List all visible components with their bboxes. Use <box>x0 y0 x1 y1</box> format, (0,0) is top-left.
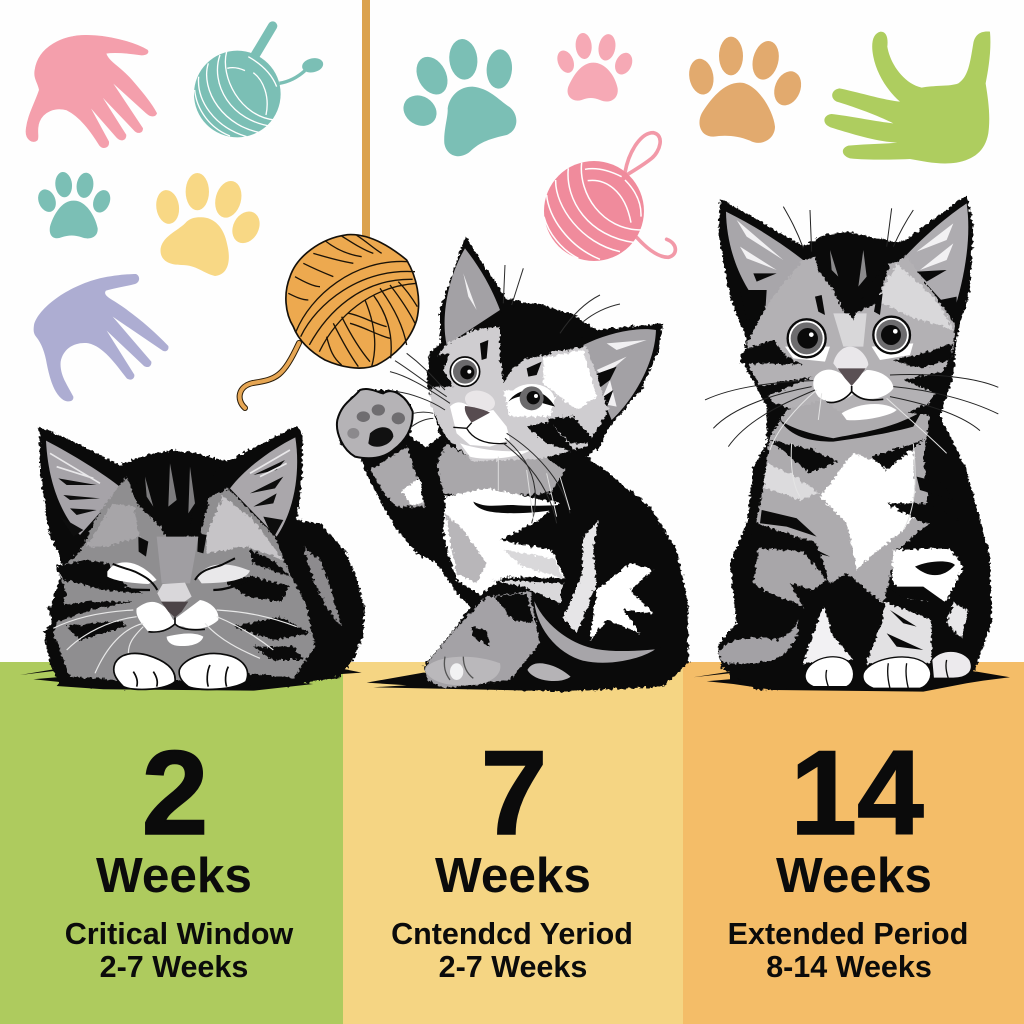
chest shading <box>445 513 487 583</box>
icon group: left decorations <box>26 26 325 401</box>
nose <box>465 406 490 423</box>
chest white fur <box>820 450 914 570</box>
text: 7 weeks label: 2-7 Weeks <box>439 950 587 984</box>
face <box>747 257 955 417</box>
mouth and chin <box>148 617 205 632</box>
ear fur <box>737 220 953 270</box>
cheek stripes <box>47 550 310 660</box>
icon: teal yarn <box>194 26 325 137</box>
chest white fur <box>443 488 565 595</box>
text: 14 weeks label: 8-14 Weeks <box>766 950 932 984</box>
panel: 2 weeks background <box>0 662 343 1024</box>
icon: pink hand <box>26 35 157 148</box>
right cheek stripes <box>527 417 597 453</box>
kitten silhouette <box>337 237 688 692</box>
illustration: sitting kitten <box>693 195 1010 692</box>
right front leg <box>867 602 932 663</box>
ears <box>445 248 500 345</box>
text: 7 weeks label: Weeks <box>435 848 591 903</box>
text: 14 weeks label: Extended Period <box>728 917 968 951</box>
text: 7 weeks label: 7 <box>481 726 547 860</box>
text: 14 weeks label <box>728 726 968 984</box>
hind leg white fur <box>590 563 653 640</box>
text: 14 weeks label: Weeks <box>776 848 932 903</box>
nose bridge <box>833 347 868 370</box>
illustration: sleeping kitten <box>20 426 364 691</box>
icon: pink paw <box>554 32 636 101</box>
left front leg <box>803 607 853 663</box>
left eye <box>450 357 480 386</box>
icon: large teal paw <box>398 38 516 156</box>
forehead stripes <box>122 451 227 552</box>
chest shading <box>763 463 820 500</box>
muzzle <box>813 370 893 402</box>
nose bridge highlight <box>157 583 192 603</box>
left paw <box>114 653 175 689</box>
face fur <box>53 477 315 680</box>
left ear <box>726 212 805 313</box>
right eye <box>873 317 910 353</box>
nose <box>838 368 866 386</box>
text: 7 weeks label <box>391 726 633 984</box>
left ear <box>46 441 122 535</box>
thigh stripes <box>887 561 955 603</box>
hind fur <box>947 603 968 638</box>
text: 7 weeks label: Cntendcd Yeriod <box>391 917 633 951</box>
tail fur streak <box>303 547 342 627</box>
front leg <box>425 592 540 688</box>
chest stripe <box>473 502 572 513</box>
nose bridge <box>463 387 497 415</box>
raised arm fur <box>370 447 425 507</box>
tail <box>718 620 799 664</box>
illustration: playing kitten <box>337 237 688 692</box>
body white fur <box>563 520 598 633</box>
flank stripes <box>490 550 563 603</box>
paw toes <box>133 665 228 687</box>
chin <box>842 404 897 420</box>
text: 14 weeks label: 14 <box>790 726 924 860</box>
text: 2 weeks label: Weeks <box>96 848 252 903</box>
kitten silhouette <box>717 195 992 690</box>
panel: 14 weeks background <box>683 662 1024 1024</box>
white eye patches <box>785 343 913 362</box>
right paw <box>179 653 248 689</box>
mouth <box>825 386 883 403</box>
leg stripes <box>887 610 923 650</box>
neck and shoulders <box>437 443 565 497</box>
paw toes <box>826 660 948 688</box>
whiskers <box>53 610 297 673</box>
kitten shadow <box>20 668 362 691</box>
kitten shadow <box>367 673 663 691</box>
cheek stripes <box>740 340 953 397</box>
tail <box>533 597 658 664</box>
right ear <box>230 437 297 537</box>
icon: orange yarn ball <box>240 235 419 408</box>
muzzle <box>136 600 218 633</box>
left cheek stripes <box>428 353 453 387</box>
closed eyes <box>100 558 253 590</box>
left thigh <box>753 548 827 607</box>
paw toes <box>425 657 500 685</box>
ear fur <box>58 460 285 538</box>
left eye <box>788 319 826 357</box>
forehead stripes <box>500 303 592 383</box>
text: 2 weeks label: 2 <box>142 726 208 860</box>
panel: 7 weeks background <box>343 662 683 1024</box>
icon: orange paw <box>686 37 806 143</box>
back paw <box>527 663 572 682</box>
left paw <box>805 657 854 687</box>
chest stripes <box>770 440 960 523</box>
raised paw <box>337 389 413 458</box>
white face patch <box>503 350 597 417</box>
icon: hanging string <box>362 0 370 240</box>
icon group: top right decorations <box>686 32 990 163</box>
muzzle <box>450 402 510 447</box>
icon: small teal paw <box>35 171 113 238</box>
icon group: right decorations <box>398 32 675 261</box>
right paw <box>863 657 931 688</box>
forehead stripes <box>812 233 887 320</box>
face highlights <box>877 263 953 330</box>
face <box>430 327 608 462</box>
icon: green hand <box>824 32 990 163</box>
right eye <box>508 384 555 414</box>
icon: lavender hand <box>34 274 168 401</box>
leg stripes <box>470 593 533 647</box>
back paw <box>932 651 971 678</box>
right ear <box>903 203 968 313</box>
mouth and chin <box>453 423 507 444</box>
nose <box>161 602 188 617</box>
kitten silhouette <box>39 426 364 688</box>
forehead highlights <box>207 497 283 560</box>
side fur <box>750 477 953 557</box>
whiskers <box>390 265 620 523</box>
text: 2 weeks label: 2-7 Weeks <box>100 950 248 984</box>
kitten shadow <box>693 672 1010 692</box>
whiskers <box>705 207 998 447</box>
text: 2 weeks label <box>65 726 294 984</box>
icon: pink yarn <box>544 133 675 261</box>
neck fur <box>757 400 930 603</box>
text: 2 weeks label: Critical Window <box>65 917 294 951</box>
neck stripes <box>780 412 922 442</box>
right thigh <box>892 548 963 602</box>
icon: yellow paw <box>154 173 265 276</box>
nose bridge <box>157 537 198 583</box>
